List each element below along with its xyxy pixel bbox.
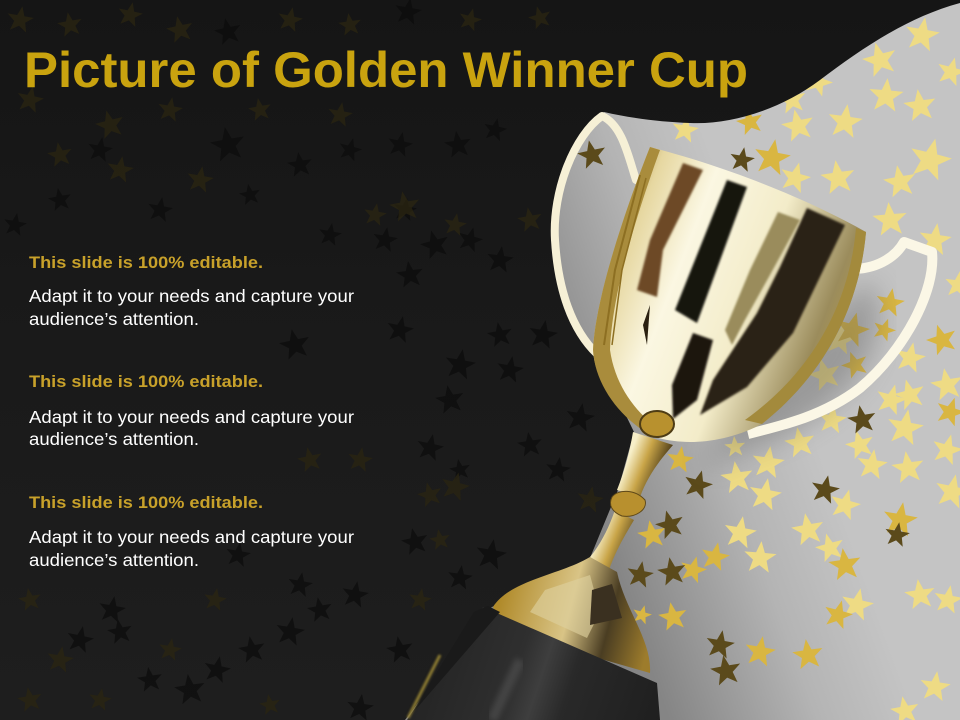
- black trophy base: [407, 607, 660, 720]
- body text 3: audience’s attention.: [29, 550, 199, 570]
- trophy: [407, 116, 932, 720]
- title: Picture of Golden Winner Cup: [24, 42, 748, 98]
- body text 1: Adapt it to your needs and capture your: [29, 286, 354, 306]
- left handle: [555, 116, 636, 354]
- stem: [590, 432, 673, 570]
- body text 2: Adapt it to your needs and capture your: [29, 407, 354, 427]
- gold star confetti on grey table: [575, 14, 960, 720]
- bowl brown reflection: [637, 163, 703, 297]
- body text 3: Adapt it to your needs and capture your: [29, 527, 354, 547]
- trophy cup bowl: [593, 147, 866, 442]
- dark star pattern on background: [2, 0, 606, 720]
- right handle: [748, 242, 932, 434]
- text block 1: [29, 253, 354, 329]
- trophy foot: [493, 557, 650, 673]
- subheading 2: This slide is 100% editable.: [29, 372, 263, 391]
- bowl top neck node: [640, 411, 674, 437]
- soft shadow under trophy: [700, 280, 879, 470]
- gold rim shading: [593, 147, 660, 436]
- body text 1: audience’s attention.: [29, 309, 199, 329]
- body text 2: audience’s attention.: [29, 429, 199, 449]
- text block 2: [29, 372, 354, 449]
- bowl black reflections: [675, 180, 747, 323]
- stem knot: [610, 491, 645, 516]
- subheading 1: This slide is 100% editable.: [29, 253, 263, 272]
- subheading 3: This slide is 100% editable.: [29, 493, 263, 512]
- text block 3: [29, 493, 354, 570]
